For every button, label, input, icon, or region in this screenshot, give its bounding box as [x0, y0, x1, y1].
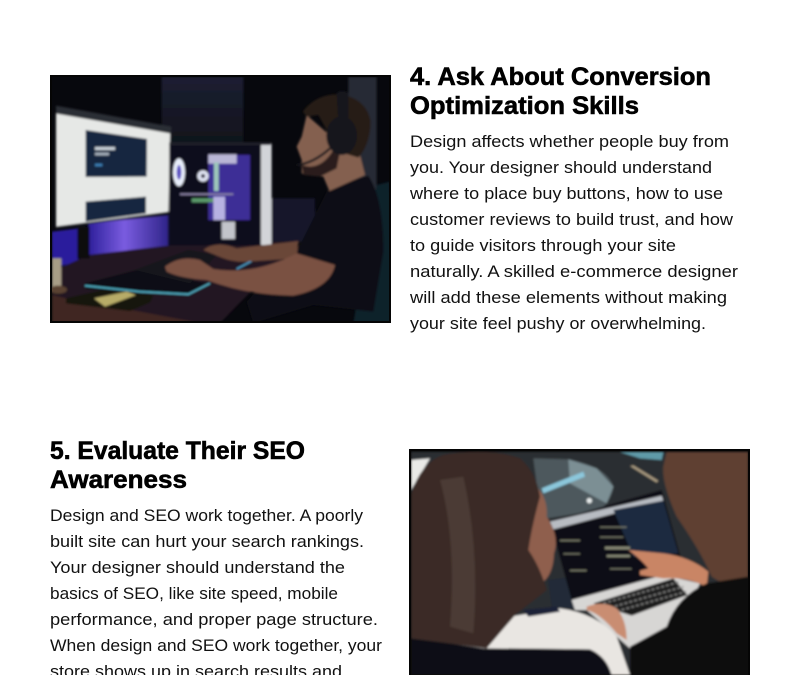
- text block: section 4 body: you. Your designer should understand: [410, 158, 712, 177]
- text block: section 5 body: Your designer should understand the: [50, 558, 345, 577]
- heading: section 5: [50, 437, 305, 494]
- heading: section 4: Optimization Skills: [410, 92, 639, 120]
- heading: section 4: 4. Ask About Conversion: [410, 63, 711, 91]
- text block: section 4 body: will add these elements without making: [409, 288, 727, 307]
- text block: section 4 body: Design affects whether people buy from: [410, 132, 729, 151]
- text block: section 5 body: built site can hurt your search rankings.: [50, 532, 364, 551]
- photo: man at a desk with monitor and gaming PC: [50, 75, 391, 323]
- text block: section 4 body: your site feel pushy or overwhelming.: [410, 314, 706, 333]
- text block: section 5 body: Design and SEO work together. A poorly: [50, 506, 364, 525]
- heading: section 5: Awareness: [50, 466, 187, 494]
- text block: section 5 body: [50, 506, 382, 675]
- text block: section 4 body: where to place buy buttons, how to use: [409, 184, 723, 203]
- text block: section 4 body: to guide visitors through your site: [410, 236, 676, 255]
- text block: section 4 body: [409, 132, 738, 333]
- text block: section 5 body: When design and SEO work together, your: [50, 636, 382, 655]
- text block: section 4 body: customer reviews to build trust, and how: [410, 210, 734, 229]
- heading: section 5: 5. Evaluate Their SEO: [50, 437, 305, 465]
- heading: section 4: [410, 63, 711, 120]
- text block: section 5 body: performance, and proper page structure.: [50, 610, 378, 629]
- text block: section 4 body: naturally. A skilled e-commerce designer: [410, 262, 738, 281]
- text block: section 5 body: basics of SEO, like site speed, mobile: [50, 584, 338, 603]
- photo: two women reviewing code on a laptop: [409, 449, 750, 675]
